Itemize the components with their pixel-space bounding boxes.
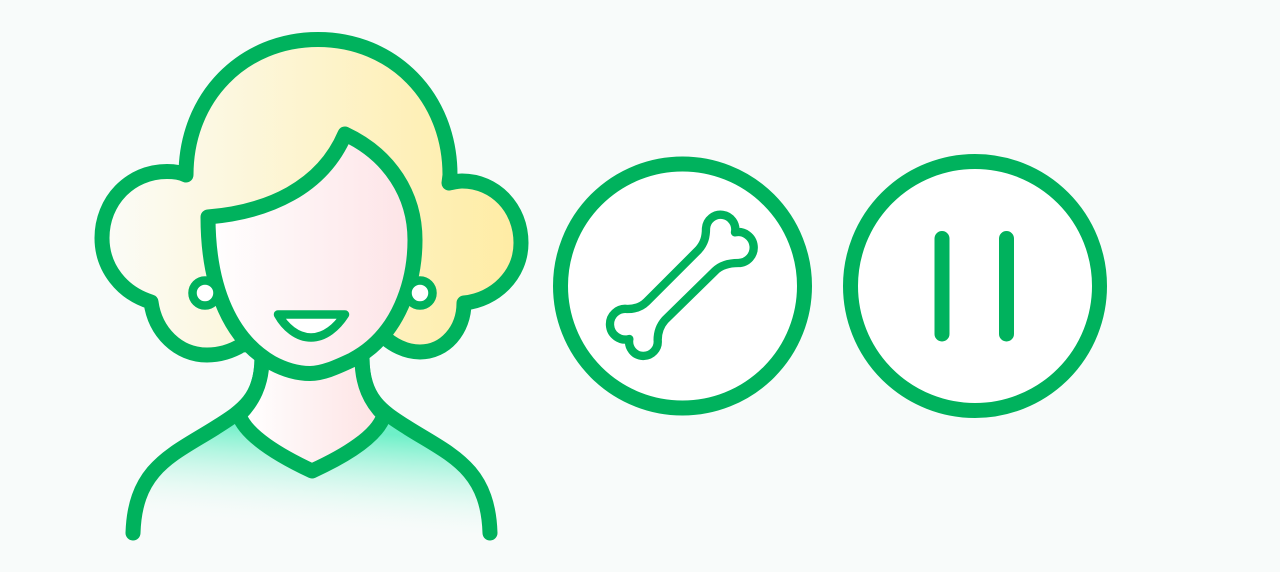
pause icon circle — [850, 162, 1100, 410]
icon: pause bars — [942, 238, 1006, 334]
neck and collar — [239, 358, 384, 471]
shirt and shoulders — [133, 358, 490, 533]
bone icon circle — [560, 164, 804, 408]
earring right — [408, 280, 432, 306]
earring left — [192, 280, 218, 306]
mouth — [278, 314, 345, 338]
hair — [102, 40, 521, 355]
person illustration — [102, 40, 521, 533]
face — [208, 134, 415, 374]
icon: bone — [610, 215, 754, 356]
circle outline — [560, 164, 804, 408]
circle outline — [850, 162, 1100, 410]
